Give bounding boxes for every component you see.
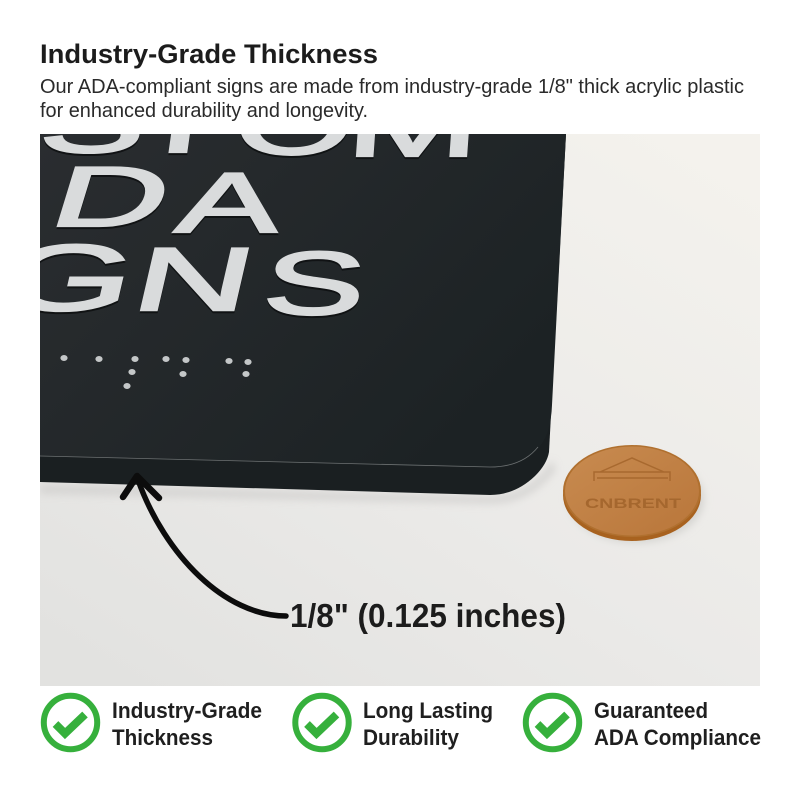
braille dots xyxy=(60,355,252,389)
benefit: Guaranteed ADA Compliance: Guaranteed xyxy=(594,698,708,723)
benefit: Long Lasting Durability xyxy=(295,696,493,750)
sign lettering: CUSTOM ADA SIGNS: D xyxy=(40,149,183,245)
sign lettering: CUSTOM ADA SIGNS: S xyxy=(32,77,157,172)
photo panel xyxy=(40,134,760,686)
benefit: Guaranteed ADA Compliance xyxy=(526,696,761,750)
icon: green check xyxy=(526,696,579,749)
sign lettering: CUSTOM ADA SIGNS: O xyxy=(230,80,359,175)
sign lettering: CUSTOM ADA SIGNS: S xyxy=(259,234,370,333)
description text: Our ADA-compliant signs are made from industry-grade 1/8" thick acrylic plastic xyxy=(40,76,744,98)
sign shadow xyxy=(40,460,556,504)
sign lettering: CUSTOM ADA SIGNS: S xyxy=(32,75,157,170)
sign lettering: CUSTOM ADA SIGNS: N xyxy=(125,231,264,331)
sign lettering: CUSTOM ADA SIGNS: M xyxy=(344,80,483,175)
sign lettering: CUSTOM ADA SIGNS: D xyxy=(40,151,183,247)
sign lettering: CUSTOM ADA SIGNS: S xyxy=(259,236,370,335)
description text: for enhanced durability and longevity. xyxy=(40,100,368,122)
benefit: Long Lasting Durability: Long Lasting xyxy=(363,698,493,723)
benefit: Industry-Grade Thickness xyxy=(44,696,262,750)
sign lettering: CUSTOM ADA SIGNS: O xyxy=(230,78,359,173)
title: Industry-Grade Thickness xyxy=(40,39,378,69)
benefit: Guaranteed ADA Compliance: ADA Compliance xyxy=(594,725,761,750)
sign lettering: CUSTOM ADA SIGNS xyxy=(40,134,469,318)
penny coin: CNBRENT xyxy=(585,495,682,511)
benefit: Industry-Grade Thickness: Thickness xyxy=(112,725,213,750)
icon: green check xyxy=(44,696,97,749)
sign lettering: CUSTOM ADA SIGNS: A xyxy=(171,156,287,251)
sign lettering: CUSTOM ADA SIGNS: A xyxy=(171,158,287,253)
sign lettering: CUSTOM ADA SIGNS: T xyxy=(127,77,237,172)
benefit: Long Lasting Durability: Durability xyxy=(363,725,460,750)
description text xyxy=(40,76,744,122)
arrow pointing to sign edge xyxy=(123,476,286,616)
sign lettering: CUSTOM ADA SIGNS: T xyxy=(127,75,237,170)
sign: black acrylic plate xyxy=(40,134,566,495)
sign lettering: CUSTOM ADA SIGNS: N xyxy=(125,229,264,329)
sign lettering: CUSTOM ADA SIGNS: M xyxy=(344,82,483,177)
benefit: Industry-Grade Thickness: Industry-Grade xyxy=(112,698,262,723)
icon: green check xyxy=(295,696,349,749)
thickness label: 1/8" (0.125 inches) xyxy=(290,597,566,634)
penny coin xyxy=(563,445,704,543)
